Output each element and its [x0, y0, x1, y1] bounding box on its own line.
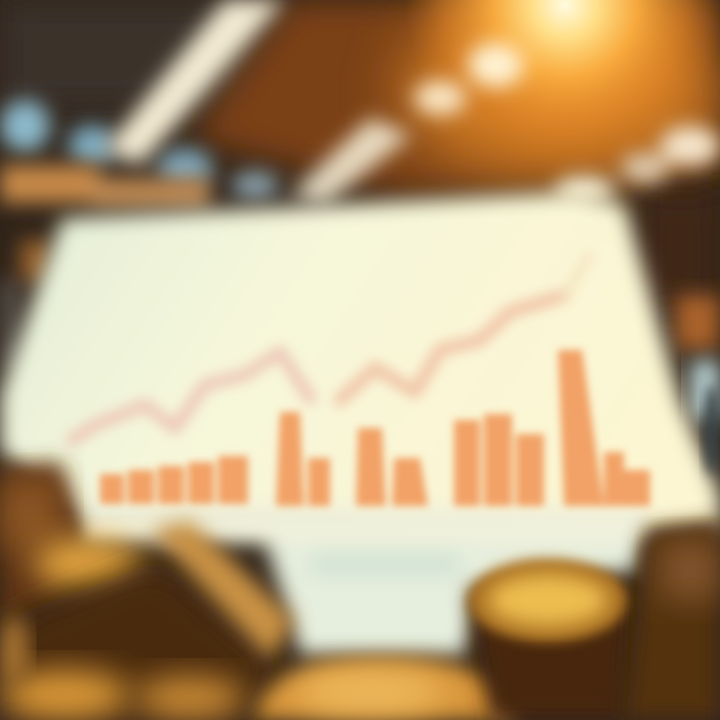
blue ceiling patches	[0, 100, 279, 199]
left foreground cup	[0, 462, 145, 620]
line chart	[72, 255, 590, 440]
far right dark object	[625, 385, 720, 720]
ceiling light strips	[104, 0, 720, 205]
centre-left dark object	[0, 520, 295, 720]
whiteboard	[0, 192, 720, 535]
right foreground cup	[468, 558, 630, 720]
sun glare	[405, 0, 720, 165]
orange band at left	[0, 165, 210, 370]
bar chart	[100, 350, 650, 506]
bottom centre golden object	[255, 658, 515, 720]
lower pale panel	[78, 505, 648, 655]
